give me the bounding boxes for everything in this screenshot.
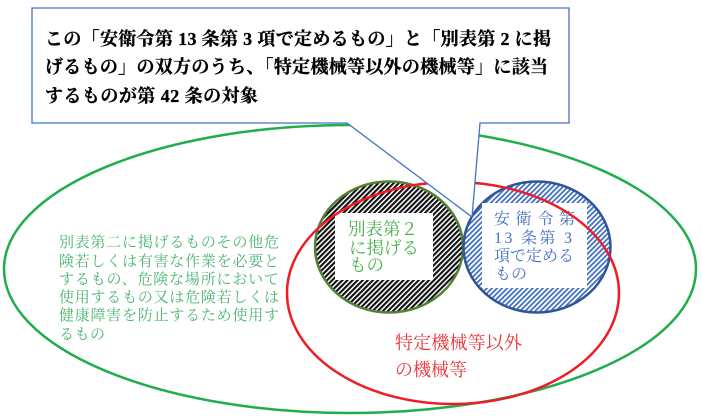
callout text: この「安衛令第 13 条第 3 項で定めるもの」と「別表第 2 に掲 [45, 28, 551, 49]
large green ellipse [4, 125, 696, 413]
red ellipse label: 特定機械等以外 [395, 332, 522, 353]
hatched circle: 別表第2: に掲げる [349, 238, 419, 258]
green ellipse description text: 険若しくは有害な作業を必要と [59, 252, 279, 270]
green ellipse description text: るもの [59, 327, 105, 343]
red ellipse [287, 182, 619, 404]
hatched circle: 安衛令第13条第3項: 安衛令第 [494, 210, 575, 228]
hatched circle: 安衛令第13条第3項: 項で定める [494, 247, 574, 265]
green ellipse description text: 別表第二に掲げるものその他危 [59, 233, 279, 251]
hatched circle: 別表第2: 別表第２ [348, 219, 418, 239]
hatched circle: 安衛令第13条第3項: もの [495, 266, 527, 283]
hatched circle: 安衛令第13条第3項: 13 条第 3 [494, 229, 572, 247]
red ellipse label: の機械等 [395, 360, 467, 380]
green ellipse description text: 健康障害を防止するため使用す [59, 306, 279, 324]
green ellipse description text: するもの、危険な場所において [59, 271, 279, 288]
callout text [45, 28, 551, 106]
callout text: するものが第 42 条の対象 [45, 86, 258, 106]
red ellipse label [395, 332, 522, 380]
hatched circle: 別表第2 [315, 182, 463, 312]
green ellipse description text [59, 233, 279, 343]
green ellipse description text: 使用するもの又は危険若しくは [59, 288, 279, 306]
hatched circle: 別表第2: もの [349, 255, 384, 275]
callout box with pointer [32, 8, 569, 217]
hatched circle: 安衛令第13条第3項 [464, 182, 610, 312]
callout text: げるもの」の双方のうち、「特定機械等以外の機械等」に該当 [45, 56, 548, 77]
